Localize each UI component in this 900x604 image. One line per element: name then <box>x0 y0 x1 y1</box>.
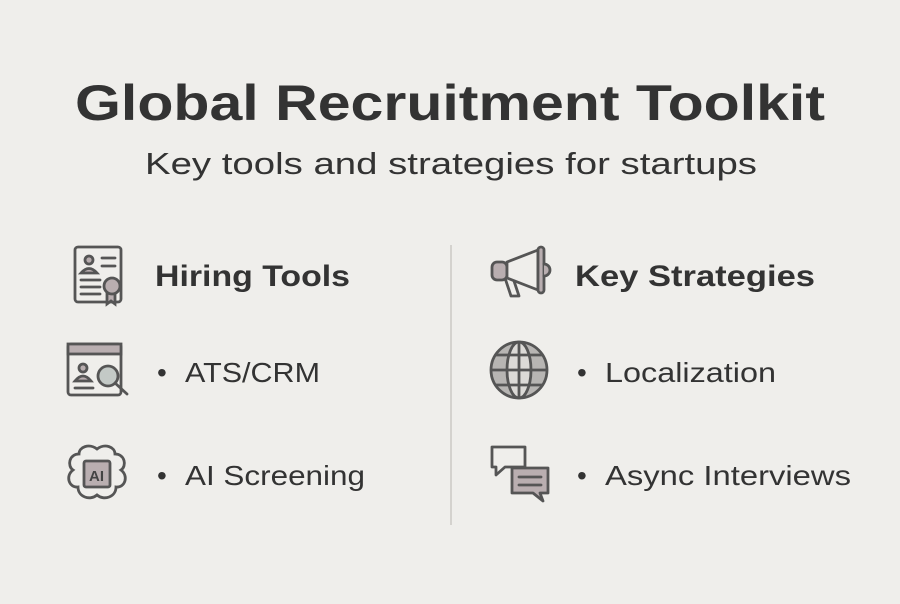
icon: ATS search <box>68 344 127 395</box>
bullet: AI Screening: AI Screening <box>185 460 365 491</box>
icon: AI brain: AI <box>89 468 104 485</box>
bullet: Localization: • <box>577 357 587 388</box>
bullet: Async Interviews: Async Interviews <box>605 460 851 491</box>
subtitle: Key tools and strategies for startups <box>145 146 757 181</box>
bullet: Async Interviews: • <box>577 460 587 491</box>
bullet: Localization: Localization <box>605 357 776 388</box>
panel: hiring tools <box>68 247 365 498</box>
title: Global Recruitment Toolkit <box>75 75 825 131</box>
heading: hiring tools: Hiring Tools <box>155 260 350 293</box>
icon: chat bubbles <box>492 447 548 501</box>
heading: key strategies: Key Strategies <box>575 260 815 293</box>
bullet: ATS/CRM: ATS/CRM <box>185 357 320 388</box>
bullet: AI Screening: • <box>157 460 167 491</box>
icon: AI brain <box>69 446 125 498</box>
bullet: ATS/CRM: • <box>157 357 167 388</box>
panel: key strategies <box>491 247 851 501</box>
icon: megaphone <box>492 247 550 296</box>
icon: globe <box>491 342 547 398</box>
icon: certificate <box>75 247 121 304</box>
